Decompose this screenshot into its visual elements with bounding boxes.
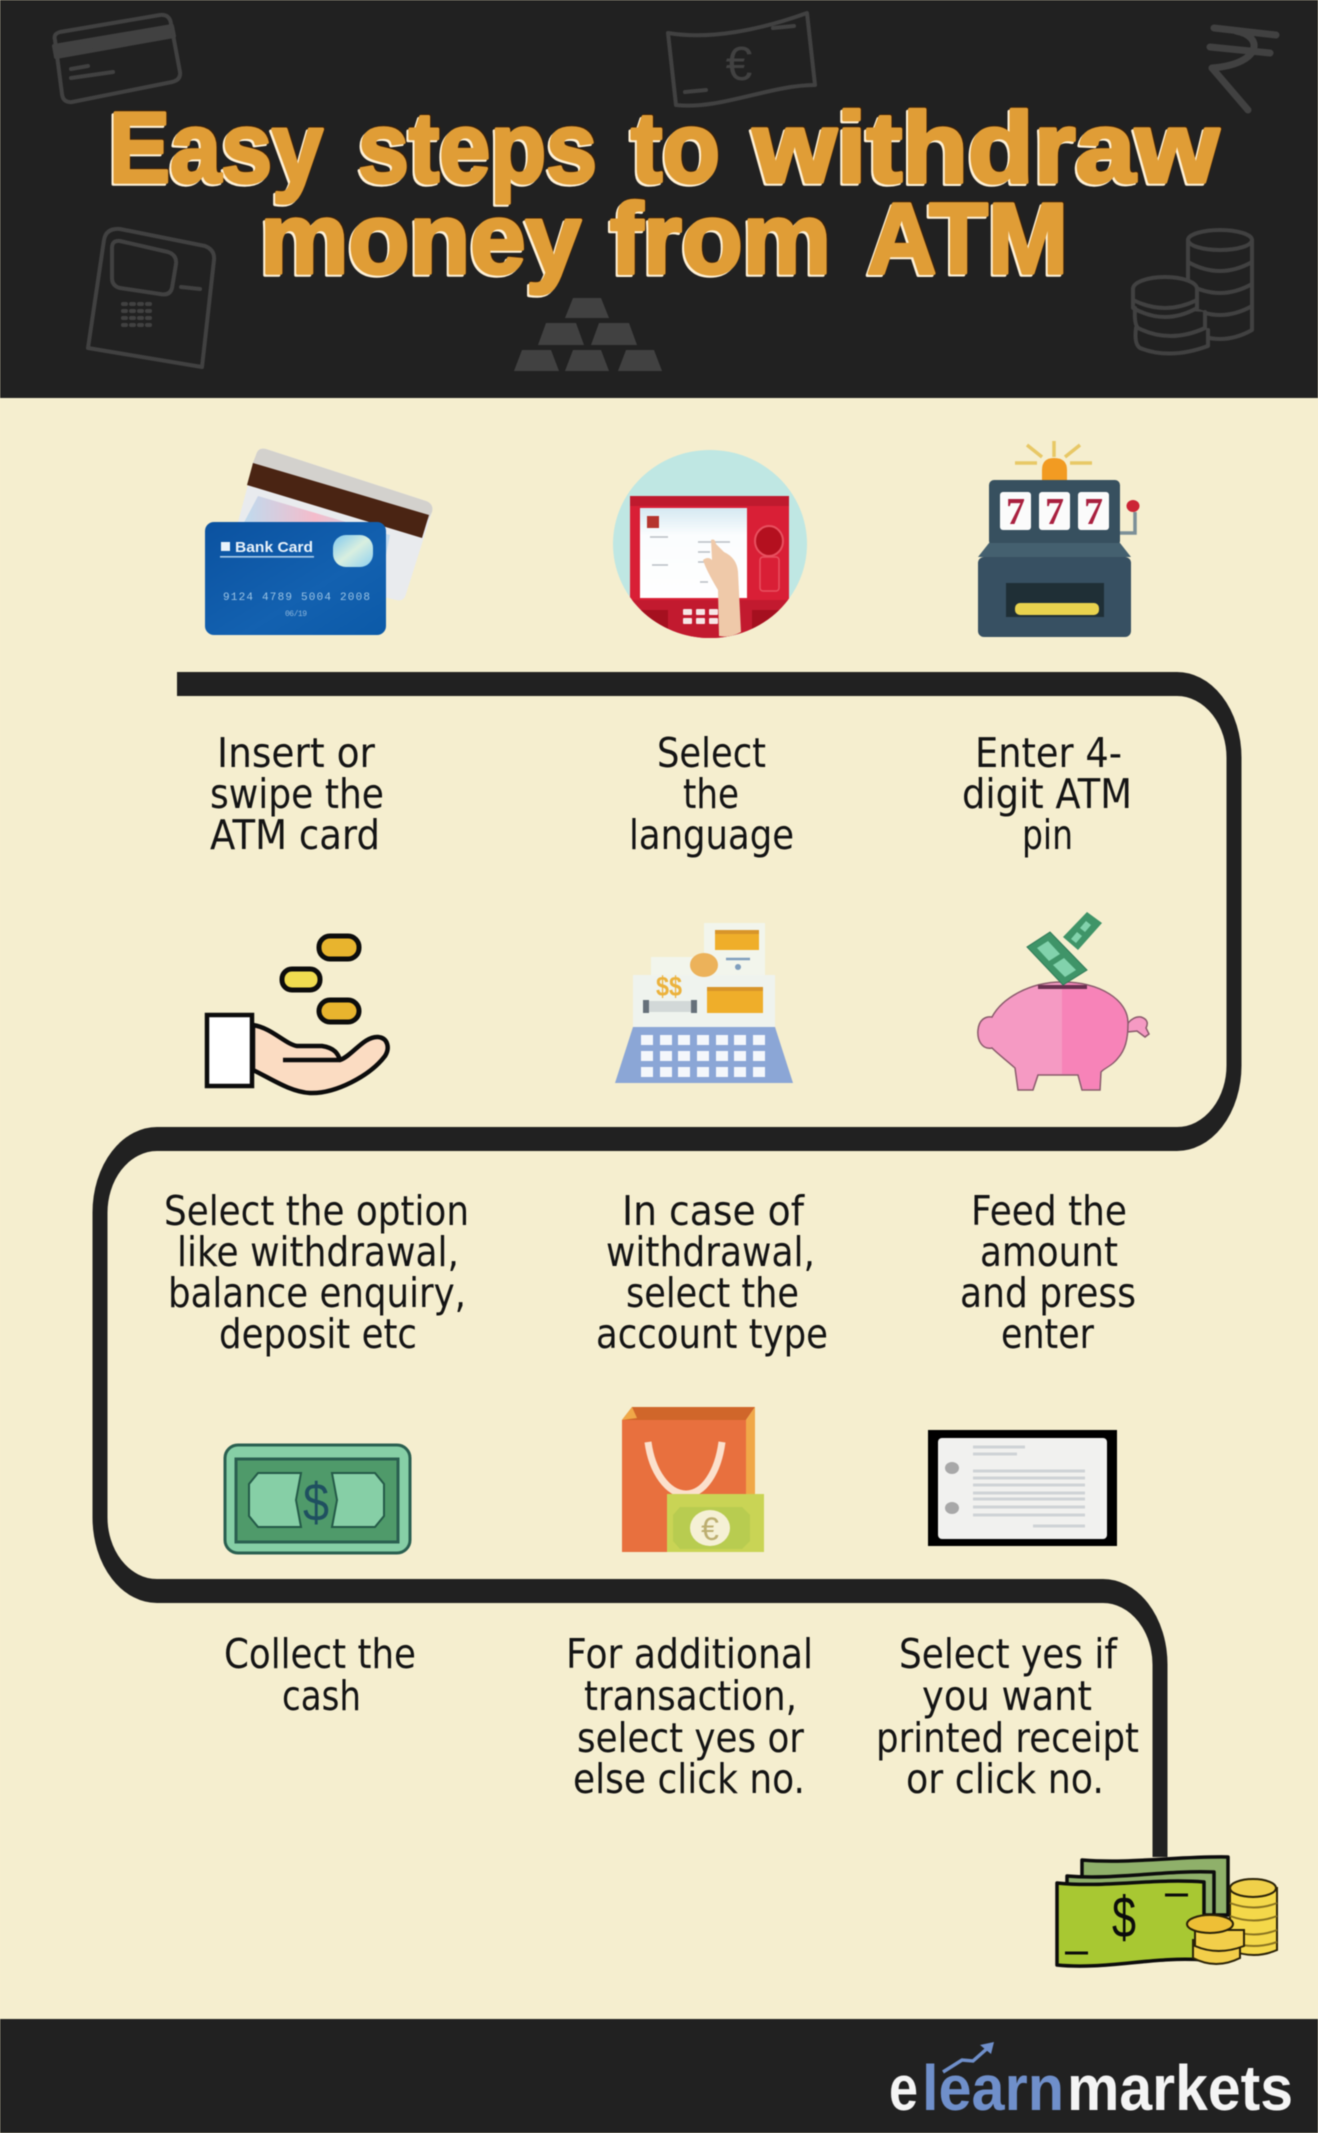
panel: footer band bbox=[0, 2019, 1318, 2133]
caption: step 8: transaction, bbox=[584, 1672, 797, 1720]
logo: elearnmarkets bbox=[889, 2042, 1293, 2124]
icon: faint credit card bbox=[54, 15, 180, 102]
title: to bbox=[631, 92, 720, 204]
caption: step 2: language bbox=[629, 811, 794, 859]
icon: faint euro note: € bbox=[726, 38, 753, 91]
caption: step 3: digit ATM bbox=[962, 770, 1132, 818]
icon: cash pile and coins: $ bbox=[1112, 1885, 1136, 1950]
logo: elearnmarkets: markets bbox=[1067, 2052, 1293, 2124]
icon: shopping bag with euro note bbox=[622, 1407, 764, 1552]
caption: step 6: amount bbox=[980, 1228, 1118, 1276]
caption: step 3: Enter 4- bbox=[975, 729, 1122, 777]
caption: step 5: withdrawal, bbox=[606, 1228, 815, 1276]
icon: slot machine 777 bbox=[978, 441, 1140, 637]
caption: step 2 bbox=[629, 729, 794, 859]
caption: step 7: cash bbox=[282, 1672, 361, 1720]
caption: step 5: account type bbox=[596, 1310, 828, 1358]
icon: bank card bbox=[205, 449, 432, 635]
icon: bank card: 9124 4789 5004 2008 bbox=[223, 592, 370, 604]
caption: step 9: or click no. bbox=[906, 1755, 1104, 1803]
title: Easy bbox=[109, 92, 323, 204]
caption: step 7: Collect the bbox=[224, 1630, 416, 1678]
title bbox=[109, 92, 1219, 295]
caption: step 5 bbox=[596, 1187, 828, 1358]
icon: piggy bank with banknotes bbox=[978, 912, 1149, 1090]
title: steps bbox=[358, 92, 597, 204]
caption: step 3: pin bbox=[1022, 811, 1073, 859]
caption: step 6 bbox=[960, 1187, 1136, 1358]
caption: step 6: Feed the bbox=[971, 1187, 1127, 1235]
icon: cash register: $$ bbox=[656, 971, 682, 1002]
icon: faint coin stacks bbox=[1133, 230, 1252, 354]
caption: step 4: deposit etc bbox=[219, 1310, 417, 1358]
icon: cash register bbox=[615, 923, 793, 1083]
winding path line bbox=[100, 684, 1234, 1857]
icon: cash pile and coins bbox=[1057, 1857, 1277, 1966]
icon: dollar banknote: $ bbox=[303, 1473, 329, 1533]
title: money bbox=[260, 183, 581, 295]
caption: step 5: In case of bbox=[622, 1187, 805, 1235]
caption: step 5: select the bbox=[626, 1269, 799, 1317]
icon: faint ATM bbox=[88, 229, 214, 367]
caption: step 1: ATM card bbox=[210, 811, 380, 859]
icon: bank card: Bank Card bbox=[235, 539, 313, 556]
caption: step 9 bbox=[876, 1630, 1139, 1803]
caption: step 1: Insert or bbox=[217, 729, 375, 777]
logo: elearnmarkets: learn bbox=[922, 2052, 1064, 2124]
caption: step 4: Select the option bbox=[164, 1187, 469, 1235]
caption: step 4: like withdrawal, bbox=[177, 1228, 459, 1276]
caption: step 2: the bbox=[683, 770, 739, 818]
icon: slot machine 777: 7 bbox=[1006, 491, 1025, 533]
caption: step 4: balance enquiry, bbox=[168, 1269, 466, 1317]
icon: slot machine 777: 7 bbox=[1045, 491, 1064, 533]
icon: faint euro note bbox=[668, 13, 815, 106]
logo: elearnmarkets: e bbox=[889, 2052, 918, 2124]
icon: faint rupee sign bbox=[1210, 28, 1276, 110]
caption: step 6: and press bbox=[960, 1269, 1136, 1317]
caption: step 9: you want bbox=[922, 1672, 1092, 1720]
caption: step 2: Select bbox=[657, 729, 766, 777]
icon: printed receipt bbox=[928, 1430, 1117, 1546]
icon: faint gold bars bbox=[514, 298, 662, 371]
caption: step 8: For additional bbox=[566, 1630, 813, 1678]
caption: step 1: swipe the bbox=[210, 770, 384, 818]
icon: shopping bag with euro note: € bbox=[701, 1511, 719, 1547]
caption: step 9: Select yes if bbox=[899, 1630, 1118, 1678]
caption: step 4 bbox=[164, 1187, 469, 1358]
caption: step 8: select yes or bbox=[577, 1714, 804, 1762]
icon: hand with coins bbox=[207, 936, 388, 1093]
caption: step 8 bbox=[566, 1630, 813, 1803]
icon: slot machine 777: 7 bbox=[1084, 491, 1103, 533]
icon: dollar banknote bbox=[225, 1445, 410, 1553]
caption: step 8: else click no. bbox=[573, 1755, 805, 1803]
caption: step 3 bbox=[962, 729, 1132, 859]
icon: ATM machine with finger bbox=[613, 450, 807, 641]
caption: step 1 bbox=[210, 729, 384, 859]
title: withdraw bbox=[752, 92, 1219, 204]
caption: step 6: enter bbox=[1001, 1310, 1094, 1358]
title: ATM bbox=[867, 183, 1068, 295]
panel: header band bbox=[0, 0, 1318, 398]
caption: step 9: printed receipt bbox=[876, 1714, 1139, 1762]
icon: bank card: 06/19 bbox=[285, 610, 307, 619]
caption: step 7 bbox=[224, 1630, 416, 1720]
title: from bbox=[610, 183, 831, 295]
